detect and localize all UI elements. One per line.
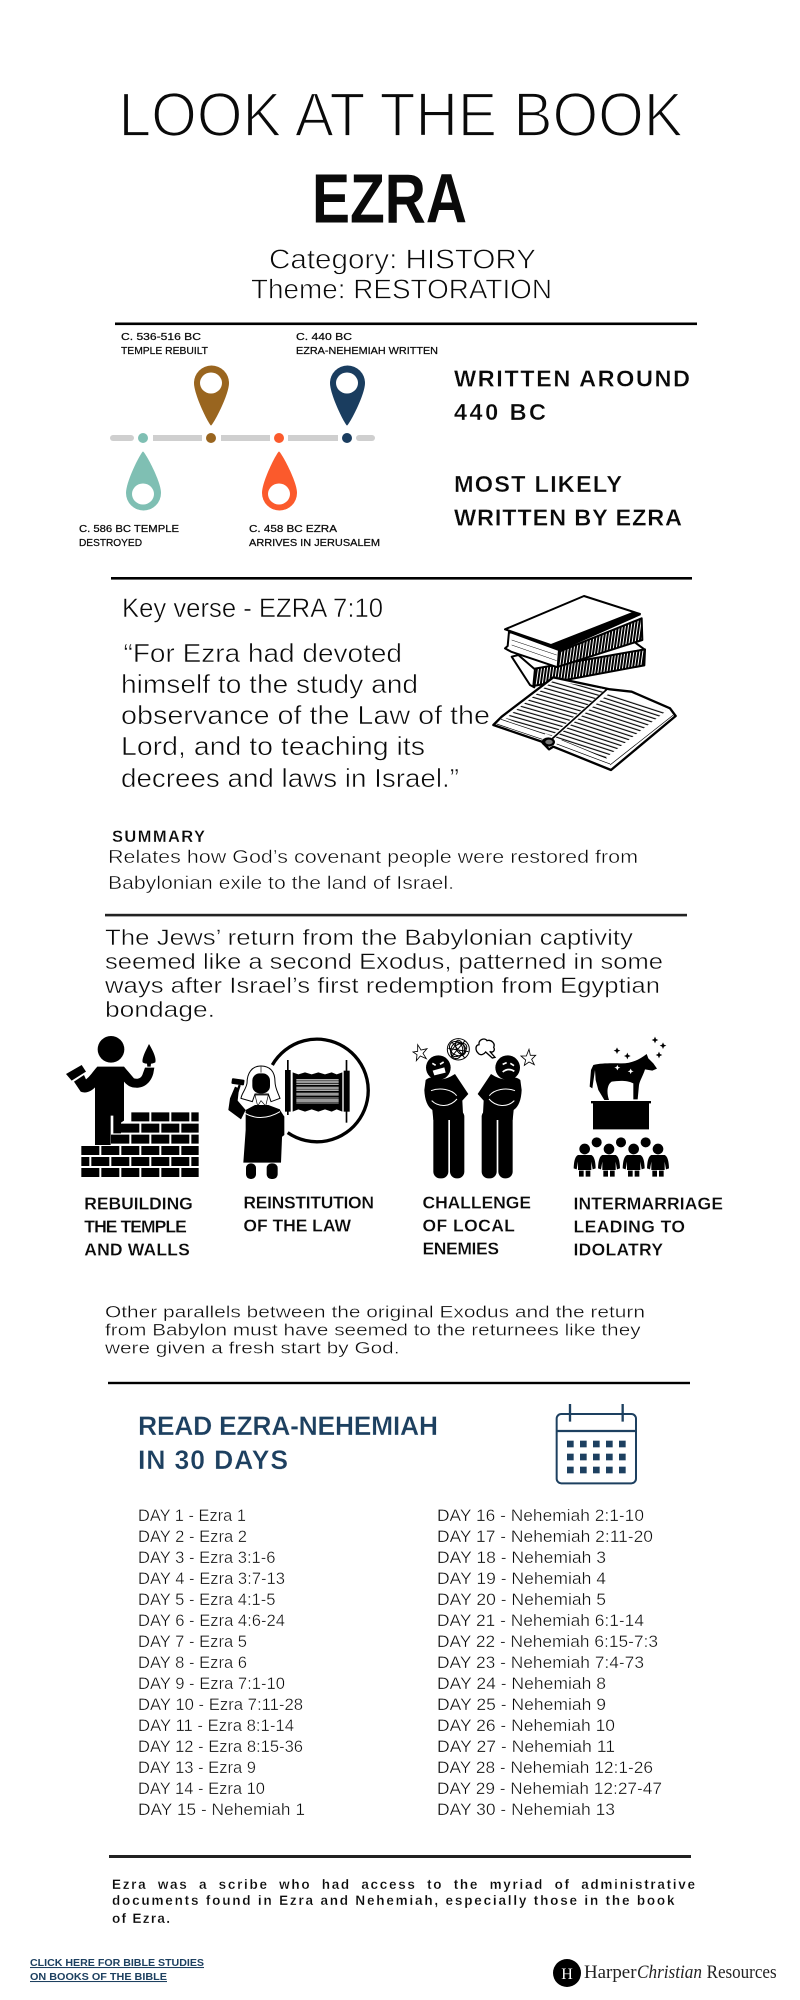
icon: two angry figures (413, 1039, 536, 1178)
parallels paragraph (104, 1302, 645, 1357)
timeline label: temple rebuilt: TEMPLE REBUILT (121, 345, 209, 357)
key verse quote: decrees and laws in Israel.” (121, 763, 459, 793)
category and theme: Theme: RESTORATION (251, 273, 552, 304)
icon: builder and brick wall (66, 1036, 199, 1177)
reading plan column: days 1 to 15: DAY 5 - Ezra 4:1-5 (138, 1591, 276, 1609)
text block: author (454, 471, 682, 530)
intro paragraph: The Jews’ return from the Babylonian captivity (105, 925, 633, 950)
icon: stack of books (493, 596, 676, 770)
reading plan heading (138, 1411, 438, 1475)
reading plan column: days 1 to 15: DAY 6 - Ezra 4:6-24 (138, 1612, 285, 1630)
reading plan column: days 1 to 15: DAY 13 - Ezra 9 (138, 1759, 256, 1777)
reading plan column: days 16 to 30: DAY 21 - Nehemiah 6:1-14 (437, 1612, 644, 1630)
label: challenge of local enemies: ENEMIES (422, 1238, 499, 1258)
figure: right enemy (478, 1055, 522, 1178)
icon: navy map pin (330, 366, 365, 426)
timeline dots (138, 433, 352, 443)
reading plan column: days 1 to 15: DAY 2 - Ezra 2 (138, 1528, 247, 1546)
intro paragraph: ways after Israel’s first redemption from Egyptian (104, 973, 660, 998)
timeline label: temple rebuilt (121, 331, 209, 357)
reading plan column: days 1 to 15: DAY 7 - Ezra 5 (138, 1633, 247, 1651)
timeline label: written (296, 331, 438, 357)
timeline label: ezra arrives: C. 458 BC EZRA (249, 523, 337, 535)
reading plan column: days 16 to 30: DAY 27 - Nehemiah 11 (437, 1738, 615, 1756)
logo: HarperChristian Resources: Harper (584, 1962, 637, 1983)
parallels paragraph: were given a fresh start by God. (104, 1338, 400, 1357)
icon: scribble (447, 1039, 469, 1060)
key verse quote: observance of the Law of the (121, 700, 490, 730)
key verse quote: Lord, and to teaching its (121, 731, 425, 761)
label: rebuilding the temple and walls: THE TEMPLE (84, 1217, 187, 1237)
reading plan column: days 16 to 30: DAY 24 - Nehemiah 8 (437, 1675, 606, 1693)
title: LOOK AT THE BOOK (118, 81, 683, 150)
icon: left star (413, 1045, 427, 1061)
timeline label: written: C. 440 BC (296, 331, 352, 343)
key verse heading: Key verse - EZRA 7:10 (122, 593, 383, 623)
link: bible studies: ON BOOKS OF THE BIBLE (30, 1971, 167, 1983)
reading plan column: days 1 to 15: DAY 4 - Ezra 3:7-13 (138, 1570, 285, 1588)
reading plan column: days 16 to 30: DAY 23 - Nehemiah 7:4-73 (437, 1654, 644, 1672)
label: intermarriage leading to idolatry (574, 1193, 723, 1260)
logo: HarperChristian Resources: Resources (707, 1962, 777, 1983)
reading plan heading: READ EZRA-NEHEMIAH (138, 1411, 438, 1441)
label: rebuilding the temple and walls (84, 1193, 193, 1260)
reading plan heading: IN 30 DAYS (138, 1445, 288, 1475)
reading plan column: days 1 to 15: DAY 11 - Ezra 8:1-14 (138, 1717, 294, 1735)
reading plan column: days 1 to 15: DAY 8 - Ezra 6 (138, 1654, 247, 1672)
panel: timeline (79, 331, 438, 549)
key verse quote (121, 638, 490, 793)
intro paragraph: seemed like a second Exodus, patterned in some (105, 949, 663, 974)
timeline label: temple destroyed: DESTROYED (79, 537, 142, 549)
timeline label: ezra arrives (249, 523, 380, 549)
reading plan column: days 16 to 30: DAY 28 - Nehemiah 12:1-26 (437, 1759, 653, 1777)
pedestal (591, 1101, 651, 1129)
reading plan column: days 1 to 15: DAY 9 - Ezra 7:1-10 (138, 1675, 285, 1693)
key verse quote: “For Ezra had devoted (124, 638, 402, 668)
figure: left enemy (424, 1055, 468, 1178)
summary text (108, 847, 638, 893)
icon: right star (521, 1049, 536, 1065)
icon: brown map pin (194, 366, 229, 426)
closing note: documents found in Ezra and Nehemiah, especially those in the book (112, 1893, 675, 1908)
category and theme: Category: HISTORY (269, 243, 536, 274)
summary heading: SUMMARY (112, 828, 205, 846)
label: intermarriage leading to idolatry: INTERMARRIAGE (574, 1193, 723, 1213)
link: bible studies: CLICK HERE FOR BIBLE STUDIES (30, 1957, 204, 1969)
summary text: Relates how God’s covenant people were restored from (108, 847, 638, 867)
label: reinstitution of the law (243, 1192, 374, 1236)
category and theme (251, 243, 552, 304)
reading plan column: days 1 to 15: DAY 1 - Ezra 1 (138, 1507, 246, 1525)
label: reinstitution of the law: REINSTITUTION (243, 1192, 374, 1212)
label: challenge of local enemies: CHALLENGE (422, 1192, 531, 1212)
label: rebuilding the temple and walls: REBUILDING (84, 1193, 193, 1213)
golden calf (590, 1054, 657, 1100)
reading plan column: days 16 to 30: DAY 29 - Nehemiah 12:27-47 (437, 1780, 662, 1798)
timeline label: temple rebuilt: C. 536-516 BC (121, 331, 201, 343)
reading plan column: days 16 to 30: DAY 16 - Nehemiah 2:1-10 (437, 1507, 644, 1525)
reading plan column: days 16 to 30: DAY 22 - Nehemiah 6:15-7:3 (437, 1633, 658, 1651)
reading plan column: days 16 to 30: DAY 30 - Nehemiah 13 (437, 1801, 615, 1819)
book name heading: EZRA (312, 160, 467, 238)
label: challenge of local enemies: OF LOCAL (422, 1216, 515, 1236)
icon: calendar (557, 1404, 636, 1483)
reading plan column: days 16 to 30: DAY 19 - Nehemiah 4 (437, 1570, 606, 1588)
label: rebuilding the temple and walls: AND WALLS (84, 1240, 190, 1260)
reading plan column: days 1 to 15: DAY 3 - Ezra 3:1-6 (138, 1549, 276, 1567)
summary text: Babylonian exile to the land of Israel. (108, 873, 454, 893)
reading plan column: days 16 to 30: DAY 25 - Nehemiah 9 (437, 1696, 606, 1714)
logo: HarperChristian Resources: Christian (637, 1962, 702, 1983)
reading plan column: days 16 to 30: DAY 26 - Nehemiah 10 (437, 1717, 615, 1735)
logo: HarperChristian Resources (553, 1959, 777, 1987)
sparkles (614, 1037, 666, 1059)
timeline label: ezra arrives: ARRIVES IN JERUSALEM (249, 537, 380, 549)
reading plan column: days 16 to 30: DAY 17 - Nehemiah 2:11-20 (437, 1528, 653, 1546)
reading plan column: days 1 to 15: DAY 12 - Ezra 8:15-36 (138, 1738, 303, 1756)
closing note: of Ezra. (112, 1911, 170, 1926)
text block: author: WRITTEN BY EZRA (454, 504, 682, 530)
parallels paragraph: Other parallels between the original Exodus and the return (105, 1302, 645, 1321)
label: reinstitution of the law: OF THE LAW (243, 1216, 351, 1236)
key verse quote: himself to the study and (121, 669, 418, 699)
logo: HarperChristian Resources: H (561, 1966, 573, 1983)
closing note (112, 1877, 695, 1926)
timeline bar (110, 435, 375, 441)
icon: steam cloud (476, 1039, 495, 1058)
parallels paragraph: from Babylon must have seemed to the returnees like they (105, 1320, 641, 1339)
text block: date written (454, 366, 690, 425)
timeline label: temple destroyed: C. 586 BC TEMPLE (79, 523, 179, 535)
reading plan column: days 1 to 15 (138, 1507, 305, 1819)
icon: golden calf idol and crowd (574, 1037, 669, 1177)
reading plan column: days 16 to 30 (437, 1507, 662, 1819)
crowd (574, 1137, 669, 1177)
reading plan column: days 1 to 15: DAY 14 - Ezra 10 (138, 1780, 265, 1798)
text block: date written: 440 BC (454, 399, 546, 425)
reading plan column: days 1 to 15: DAY 15 - Nehemiah 1 (138, 1801, 305, 1819)
reading plan column: days 16 to 30: DAY 18 - Nehemiah 3 (437, 1549, 606, 1567)
intro paragraph (104, 925, 663, 1022)
text block: date written: WRITTEN AROUND (454, 366, 690, 392)
label: intermarriage leading to idolatry: LEADING TO (574, 1217, 685, 1237)
timeline label: temple destroyed (79, 523, 179, 549)
closing note: Ezra was a scribe who had access to the myriad of administrative (112, 1877, 695, 1892)
label: challenge of local enemies (422, 1192, 531, 1258)
intro paragraph: bondage. (105, 997, 215, 1022)
link: bible studies (30, 1957, 204, 1983)
text block: author: MOST LIKELY (454, 471, 622, 497)
icon: teal map pin (126, 452, 161, 510)
timeline label: written: EZRA-NEHEMIAH WRITTEN (296, 345, 438, 357)
label: intermarriage leading to idolatry: IDOLATRY (574, 1240, 663, 1260)
reading plan column: days 16 to 30: DAY 20 - Nehemiah 5 (437, 1591, 606, 1609)
reading plan column: days 1 to 15: DAY 10 - Ezra 7:11-28 (138, 1696, 303, 1714)
icon: orange map pin (262, 452, 297, 510)
icon: judge with scroll (228, 1039, 368, 1179)
